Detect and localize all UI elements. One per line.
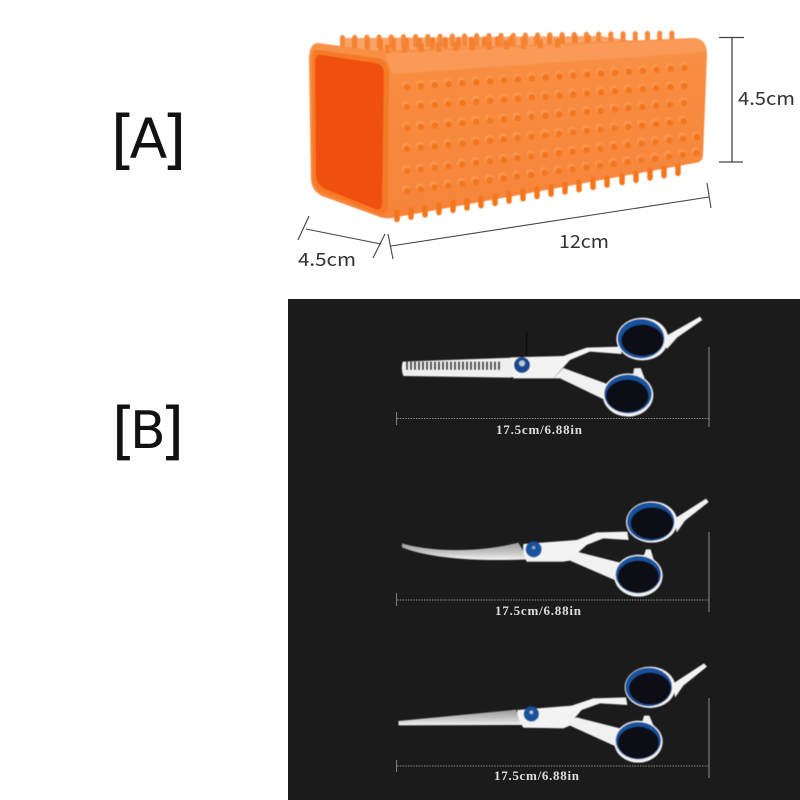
text: height value: 4.5cm <box>738 85 795 111</box>
text: size 1: 17.5cm/6.88in <box>496 422 583 437</box>
blade with teeth <box>402 358 517 378</box>
scissors 2: curved shears <box>402 499 709 597</box>
text: depth value: 4.5cm <box>298 246 356 272</box>
label: [B]: ] <box>160 394 184 467</box>
upper handle <box>511 347 622 378</box>
lower handle <box>513 368 610 402</box>
top band highlight <box>385 39 706 74</box>
panel: orange silicone brush with dimensions <box>298 33 795 272</box>
pivot screw <box>526 541 542 557</box>
scissors 3: straight shears <box>398 663 707 763</box>
pivot screw <box>514 357 530 373</box>
front top spikes <box>385 43 560 49</box>
text: size 3: 17.5cm/6.88in <box>494 768 580 783</box>
upper handle <box>517 697 627 728</box>
top spikes <box>340 33 680 56</box>
text: size 2: 17.5cm/6.88in <box>495 603 582 618</box>
upper handle <box>523 532 629 562</box>
panel: dark scissors background <box>288 299 800 800</box>
text: length value: 12cm <box>559 228 609 254</box>
label: [A]: A <box>130 107 168 171</box>
brush body <box>309 38 707 218</box>
bristle rows <box>406 65 697 191</box>
dimension: height 4.5cm <box>719 37 744 162</box>
icon: orange silicone brush <box>309 33 707 220</box>
lower handle <box>525 552 620 582</box>
label: [B]: [ <box>112 394 136 467</box>
label: [A]: ] <box>162 104 186 178</box>
end opening <box>312 50 389 215</box>
pivot screw <box>524 706 539 722</box>
straight blade <box>398 710 523 725</box>
lower handle <box>522 717 620 748</box>
label: [A]: [ <box>111 104 136 178</box>
dimension: width 4.5cm <box>298 216 385 258</box>
dimension: length 12cm <box>388 183 711 259</box>
curved blade <box>402 543 528 560</box>
scissors 1: thinning shears <box>402 317 702 417</box>
bottom spikes <box>397 166 678 220</box>
label: [B]: B <box>130 401 166 461</box>
